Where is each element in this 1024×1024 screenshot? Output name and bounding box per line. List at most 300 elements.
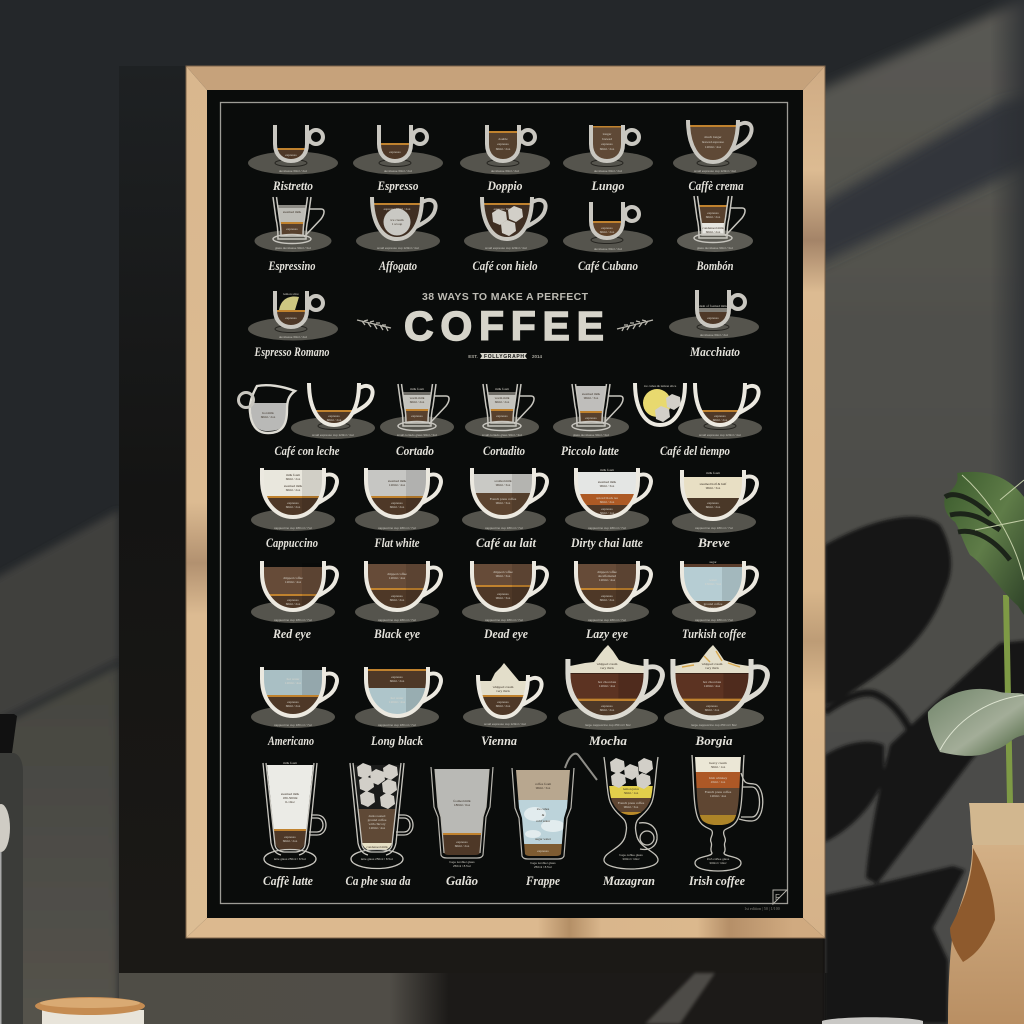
- saucer: [356, 230, 440, 252]
- frame: right rail: [803, 66, 825, 938]
- name: Café del tiempo: [660, 443, 730, 458]
- row 7: Vienna: very thick: [496, 689, 510, 693]
- row 7: Vienna: [463, 663, 547, 748]
- glass outline: [604, 757, 658, 869]
- layers: [278, 205, 306, 234]
- row 5: Flat white: cappuccino cup 180 ml / 7oz: [378, 526, 417, 530]
- cup: espresso: [714, 414, 726, 418]
- tumbler glass outline: [512, 768, 574, 859]
- row 5: Flat white: steamed milk: [388, 479, 406, 483]
- row 1: Doppio: double: [498, 137, 508, 141]
- layers: [432, 769, 492, 856]
- row 2: Café Cubano: demitasse 60ml / 2oz: [594, 247, 623, 251]
- row 8: Galão: 250ml / 8.5oz: [453, 864, 472, 868]
- layers: [262, 670, 324, 717]
- saucer: [563, 230, 653, 252]
- row 5: Flat white: [355, 468, 441, 550]
- row 3: Macchiato: [669, 290, 759, 359]
- row 7: Borgia: hot chocolate: [703, 680, 722, 684]
- row 5: Café au lait: French press coffee: [490, 497, 517, 501]
- name: Frappe: [525, 873, 560, 888]
- row 8: Irish coffee: 45ml / 1oz: [711, 780, 726, 784]
- row 8: Caffè latte: 180-300ml: [283, 796, 297, 800]
- edition note: 1st edition | 50 | 1/100: [744, 906, 780, 911]
- upper leaf: [944, 472, 1024, 615]
- row 8: Frappe: &: [542, 813, 545, 817]
- name: Irish coffee: [688, 873, 745, 888]
- saucer: [355, 509, 439, 531]
- row 5: Breve: 90ml / 3oz: [706, 486, 721, 490]
- row 7: Americano: hot water: [287, 677, 300, 681]
- row 8: Galão: espresso: [456, 840, 468, 844]
- layers: [368, 470, 426, 515]
- row 4: Cortadito: 60ml / 2oz: [495, 400, 510, 404]
- est. line: EST.: [468, 354, 478, 359]
- whipped cream: [675, 645, 749, 673]
- row 2: Affogato: ice cream: [390, 218, 404, 222]
- row 5: Café au lait: [462, 468, 547, 550]
- row 3: Espresso Romano: lemon slice: [283, 292, 299, 296]
- row 4: Cortadito: milk foam: [495, 387, 509, 391]
- row 5: Dirty chai latte: milk foam: [600, 468, 614, 472]
- row 7: Mocha: very thick: [600, 666, 614, 670]
- row 6: Black eye: [355, 561, 441, 641]
- frame: top rail: [186, 66, 825, 90]
- row 8: Caffè latte: milk foam: [283, 761, 297, 765]
- cup: small espresso cup 120ml / 4oz: [699, 433, 742, 437]
- row 8: Frappe: sugar water: [535, 837, 552, 841]
- saucer: [677, 230, 753, 252]
- name: Flat white: [374, 535, 420, 550]
- row 3: Espresso Romano: [248, 291, 338, 359]
- row 7: Vienna: small espresso cup 120ml / 4oz: [484, 722, 527, 726]
- name: Café au lait: [476, 535, 536, 550]
- row 4: Cortado: milk foam: [410, 387, 424, 391]
- row 4: Piccolo latte: espresso: [585, 416, 597, 420]
- name: Café con hielo: [472, 258, 538, 273]
- layers: [472, 563, 534, 611]
- row 8: Mazagran: huge coffee glass: [619, 853, 643, 857]
- ice cubes: [610, 758, 653, 789]
- row 5: Flat white: 60ml / 2oz: [390, 505, 405, 509]
- row 6: Lazy eye: dripped coffee: [597, 570, 617, 574]
- row 1: Lungo: espresso: [601, 142, 613, 146]
- bag top flap: [969, 803, 1024, 845]
- saucer: [248, 318, 338, 340]
- row 2: Espressino: espresso: [286, 227, 298, 231]
- saucer: [353, 152, 443, 174]
- row 8: Galão: huge tumbler glass: [449, 860, 475, 864]
- row 1: Lungo: longer: [603, 132, 612, 136]
- row 8: Irish coffee: 300ml / 10oz: [709, 861, 727, 865]
- name: Borgia: [694, 733, 733, 748]
- row 1: Ristretto: [248, 125, 338, 193]
- name: Cortadito: [483, 443, 525, 458]
- row 8: Irish coffee: French press coffee: [705, 790, 732, 794]
- saucer: [669, 316, 759, 338]
- row 4: Cortado: [380, 384, 454, 458]
- row 8: Mazagran: lemon juice: [623, 787, 639, 791]
- row 2: Bombón: 60ml / 2oz: [706, 230, 721, 234]
- row 7: Borgia: very thick: [705, 666, 719, 670]
- row 8: Caffè latte: steamed milk: [281, 792, 299, 796]
- row 7: Mocha: 120ml / 4oz: [599, 684, 616, 688]
- name: Bombón: [696, 258, 734, 273]
- plant: [928, 472, 1024, 803]
- est. line: 2014: [532, 354, 543, 359]
- row 7: Americano: 120ml / 4oz: [285, 681, 302, 685]
- kraft paper bag: [948, 803, 1024, 1024]
- row 6: Lazy eye: cappuccino cup 180 ml / 7oz: [588, 618, 627, 622]
- row 4: Piccolo latte: steamed milk: [582, 392, 600, 396]
- row 5: Breve: espresso: [707, 501, 719, 505]
- folded corner logo: F: [775, 893, 780, 902]
- row 7: Americano: espresso: [287, 700, 299, 704]
- name: Lazy eye: [585, 626, 628, 641]
- layers: [693, 757, 743, 825]
- row 8: Irish coffee: 120ml / 4oz: [710, 794, 727, 798]
- row 5: Breve: 60ml / 2oz: [706, 505, 721, 509]
- row 8: Frappe: coffee foam: [535, 782, 551, 786]
- saucer: [463, 706, 547, 728]
- name: Long black: [370, 733, 423, 748]
- cup: 60ml / 2oz: [713, 418, 728, 422]
- row 6: Black eye: espresso: [391, 594, 403, 598]
- row 5: Flat white: 120ml / 4oz: [389, 483, 406, 487]
- row 1: Caffè crema: brewed espresso: [702, 140, 724, 144]
- row 8: Ca phe sua da: condensed milk: [366, 845, 388, 849]
- row 2: Affogato: 1 scoop: [392, 222, 403, 226]
- row 6: Turkish coffee: 2 tsp: [710, 606, 717, 610]
- name: Cappuccino: [266, 535, 318, 550]
- laurel left: [357, 320, 391, 331]
- row 8: Ca phe sua da: latte glass 250ml / 8.5oz: [361, 857, 394, 861]
- row 6: Red eye: 120ml / 4oz: [285, 580, 302, 584]
- saucer: [460, 152, 550, 174]
- row 6: Red eye: 60ml / 2oz: [286, 602, 301, 606]
- layers: [576, 472, 638, 518]
- row 5: Dirty chai latte: spiced black tea: [596, 496, 618, 500]
- row 4: Cortadito: small cortado glass 90ml / 3oz: [482, 433, 523, 437]
- row 6: Red eye: cappuccino cup 180 ml / 7oz: [274, 618, 313, 622]
- row 8: Caffè latte: 6-10oz: [285, 800, 295, 804]
- row 5: Breve: [672, 470, 757, 550]
- name: Lungo: [591, 178, 625, 193]
- name: Dead eye: [483, 626, 528, 641]
- row 1: Caffè crema: much longer: [704, 135, 722, 139]
- saucer: [254, 230, 332, 252]
- row 1: Lungo: demitasse 60ml / 2oz: [594, 169, 623, 173]
- pitcher: 60ml / 2oz: [261, 415, 276, 419]
- row 2: Affogato: [356, 197, 440, 273]
- row 1: Ristretto: demitasse 60ml / 2oz: [279, 169, 308, 173]
- whipped cream: [570, 645, 644, 673]
- layers: [699, 308, 727, 324]
- row 8: Caffè latte: [260, 761, 326, 888]
- row 2: Espressino: [254, 197, 332, 273]
- folded corner logo: [773, 890, 787, 904]
- row 2: Café con hielo: small espresso cup 120ml / 4oz: [485, 246, 528, 250]
- row 8: Mazagran: 90ml / 3oz: [624, 805, 639, 809]
- row 7: Americano: [251, 667, 337, 748]
- row 8: Mazagran: ice cubes: [625, 768, 638, 772]
- coffee layers: [381, 143, 409, 159]
- cup: [291, 383, 375, 439]
- row 6: Turkish coffee: cappuccino cup 180 ml / 7oz: [695, 618, 734, 622]
- row 5: Dirty chai latte: espresso: [601, 507, 613, 511]
- row 4: Cortadito: espresso: [496, 414, 508, 418]
- row 6: Turkish coffee: [672, 560, 757, 641]
- row 8: Frappe: ice cubes: [537, 807, 550, 811]
- row 8: Galão: foamed milk: [453, 799, 471, 803]
- frame: left rail: [186, 66, 207, 938]
- poster frame: [186, 66, 825, 938]
- lower leaf: [928, 689, 1024, 756]
- row 4: Cortado: small cortado glass 90ml / 3oz: [397, 433, 438, 437]
- row 6: Dead eye: espresso: [497, 592, 509, 596]
- row 6: Red eye: dripped coffee: [283, 576, 303, 580]
- stem: [1006, 595, 1010, 803]
- row 8: Ca phe sua da: dark roasted: [369, 814, 386, 818]
- row 8: Ca phe sua da: 120ml / 4oz: [369, 826, 386, 830]
- layers: [474, 474, 532, 515]
- heading: COFFEE: [404, 303, 604, 349]
- row 7: Mocha: hot chocolate: [598, 680, 617, 684]
- row 7: Mocha: espresso: [601, 704, 613, 708]
- row 8: Ca phe sua da: [346, 763, 413, 888]
- row 5: Dirty chai latte: cappuccino cup 180 ml / 7oz: [588, 526, 627, 530]
- row 6: Dead eye: 90ml / 3oz: [496, 596, 511, 600]
- saucer: [673, 152, 757, 174]
- row 1: Doppio: 60ml / 2oz: [496, 147, 511, 151]
- saucer: [672, 511, 756, 533]
- subtitle: 38 WAYS TO MAKE A PERFECT: [422, 291, 589, 303]
- row 6: Red eye: [251, 561, 337, 641]
- est. line: [468, 353, 543, 360]
- layers: [698, 205, 728, 234]
- row 4: Piccolo latte: glass demitasse 90ml / 3oz: [573, 433, 610, 437]
- row 7: Americano: cappuccino cup 180 ml / 7oz: [274, 723, 313, 727]
- row 2: Café Cubano: [563, 202, 653, 273]
- row 3: Espresso Romano: espresso: [285, 316, 297, 320]
- cup: small espresso cup 120ml / 4oz: [312, 433, 355, 437]
- row 5: Café au lait: scalded milk: [494, 479, 512, 483]
- layers: [513, 770, 573, 857]
- saucer: [462, 601, 546, 623]
- row 8: Mazagran: 300ml / 10oz: [622, 857, 640, 861]
- saucer: [558, 706, 658, 730]
- row 5: Café au lait: 90ml / 3oz: [496, 483, 511, 487]
- row 5: Dirty chai latte: [565, 468, 651, 550]
- row 7: Americano: 60ml / 2oz: [286, 704, 301, 708]
- row 5: Cappuccino: milk foam: [286, 473, 300, 477]
- layers: [478, 681, 528, 718]
- row 2: Café con hielo: [464, 197, 548, 273]
- row 6: Lazy eye: espresso: [601, 594, 613, 598]
- row 8: Ca phe sua da: ground coffee: [368, 818, 387, 822]
- poster background: [207, 90, 803, 918]
- name: Café con leche: [274, 443, 340, 458]
- row 8: Ca phe sua da: with chicory: [368, 822, 386, 826]
- saucer: [462, 509, 546, 531]
- jar at bottom: [35, 997, 145, 1024]
- saucer: [664, 706, 764, 730]
- row 4: Cortado: warm milk: [410, 396, 425, 400]
- name: Ca phe sua da: [346, 873, 411, 888]
- name: Café Cubano: [578, 258, 638, 273]
- row 7: Mocha: 60ml / 2oz: [600, 708, 615, 712]
- row 3: Espresso Romano: demitasse 60ml / 2oz: [279, 335, 308, 339]
- row 6: Lazy eye: decaffeinated: [598, 574, 616, 578]
- pitcher: [238, 385, 295, 433]
- coffee layers: [593, 126, 621, 159]
- row 8: Mazagran: French press coffee: [618, 801, 645, 805]
- name: Black eye: [373, 626, 420, 641]
- row 5: Dirty chai latte: steamed milk: [598, 480, 616, 484]
- layers: [682, 564, 744, 611]
- row 1: Doppio: [460, 125, 550, 193]
- name: Doppio: [487, 178, 523, 193]
- layers: [374, 203, 420, 237]
- name: Galão: [446, 873, 478, 888]
- layers: [277, 296, 305, 325]
- row 8: Frappe: [512, 754, 597, 888]
- row 7: Mocha: whipped cream: [597, 662, 618, 666]
- row 7: Long black: espresso: [391, 675, 403, 679]
- glass outline: [692, 755, 763, 871]
- row 2: Affogato: small espresso cup 120ml / 4oz: [377, 246, 420, 250]
- row 5: Dirty chai latte: 30ml / 1oz: [600, 511, 615, 515]
- row 2: Café Cubano: espresso: [601, 226, 613, 230]
- saucer: [380, 416, 454, 438]
- layers: [366, 563, 428, 611]
- row 2: Bombón: condensed milk: [702, 226, 724, 230]
- row 2: Bombón: espresso: [707, 211, 719, 215]
- row 1: Lungo: 60ml / 2oz: [600, 147, 615, 151]
- row 6: Black eye: cappuccino cup 180 ml / 7oz: [378, 618, 417, 622]
- row 2: Café Cubano: 60ml / 2oz: [600, 230, 615, 234]
- row 4: Café con leche: [238, 383, 375, 458]
- saucer: [553, 416, 629, 438]
- row 3: Macchiato: demitasse 60ml / 2oz: [700, 333, 729, 337]
- row 7: Vienna: 60ml / 2oz: [496, 704, 511, 708]
- layers: [262, 563, 324, 611]
- layers: [347, 765, 407, 851]
- row 5: Breve: milk foam: [706, 471, 720, 475]
- name: Espresso: [377, 178, 419, 193]
- layers: [484, 203, 530, 237]
- layers: [606, 786, 656, 817]
- row 5: Cappuccino: cappuccino cup 180 ml / 7oz: [274, 526, 313, 530]
- row 6: Dead eye: 90ml / 3oz: [496, 574, 511, 578]
- cup: [678, 383, 762, 439]
- row 7: Long black: 60ml / 2oz: [390, 679, 405, 683]
- name: Macchiato: [689, 344, 740, 359]
- row 1: Lungo: [563, 125, 653, 193]
- row 8: Frappe: huge tumbler glass: [530, 861, 556, 865]
- layers: [366, 669, 428, 717]
- row 4: Piccolo latte: 90ml / 3oz: [584, 396, 599, 400]
- cup: espresso: [328, 414, 340, 418]
- row 2: Affogato: espresso 60ml / 2oz: [384, 207, 411, 211]
- row 5: Cappuccino: espresso: [287, 501, 299, 505]
- saucer: [565, 509, 649, 531]
- row 1: Caffè crema: [673, 120, 757, 193]
- whipped cream: [478, 663, 528, 689]
- tumbler glass outline: [431, 767, 493, 858]
- name: Mazagran: [602, 873, 655, 888]
- plant shadow on wall: [825, 517, 1024, 1024]
- coffee layers: [277, 148, 305, 159]
- est. line: FOLLYGRAPH: [484, 354, 524, 360]
- row 7: Mocha: large cappuccino cup 250 ml / 8oz: [585, 723, 631, 727]
- row 6: Turkish coffee: sugar: [709, 560, 718, 564]
- row 8: Galão: 180ml / 6oz: [454, 803, 471, 807]
- name: Piccolo latte: [561, 443, 619, 458]
- row 5: Breve: cappuccino cup 180 ml / 7oz: [695, 526, 734, 530]
- layers: [576, 386, 606, 423]
- row 7: Long black: hot water: [391, 696, 404, 700]
- row 8: Mazagran: 30ml / 1oz: [624, 791, 639, 795]
- row 7: Borgia: espresso: [706, 704, 718, 708]
- row 8: Frappe: cold water: [536, 819, 551, 823]
- pitcher: hot milk: [262, 411, 274, 415]
- bottle at left edge: [0, 714, 23, 1024]
- ice and lemon bowl: ice cubes & lemon slice: [644, 384, 677, 388]
- row 1: Espresso: demitasse 60ml / 2oz: [384, 169, 413, 173]
- row 6: Red eye: espresso: [287, 598, 299, 602]
- name: Affogato: [378, 258, 417, 273]
- row 7: Vienna: whipped cream: [493, 685, 514, 689]
- row 5: Café au lait: cappuccino cup 180 ml / 7oz: [485, 526, 524, 530]
- straw: [565, 754, 597, 780]
- row 4: Piccolo latte: [553, 384, 629, 458]
- saucer: [251, 706, 335, 728]
- name: Red eye: [272, 626, 311, 641]
- name: Caffè crema: [688, 178, 744, 193]
- layers: [403, 392, 431, 422]
- saucer: [672, 601, 756, 623]
- row 5: Cappuccino: [251, 468, 337, 550]
- row 2: Café con hielo: espresso 60ml / 2oz: [494, 207, 521, 211]
- saucer: [465, 416, 539, 438]
- row 2: Bombón: [677, 196, 753, 273]
- row 1: Doppio: espresso: [497, 142, 509, 146]
- coffee layers: [690, 125, 736, 160]
- row 7: Borgia: 120ml / 4oz: [704, 684, 721, 688]
- saucer: [248, 152, 338, 174]
- row 3: Macchiato: dash of foamed milk: [699, 304, 727, 308]
- saucer: [464, 230, 548, 252]
- row 6: Turkish coffee: ground coffee: [704, 602, 723, 606]
- row 7: Long black: cappuccino cup 180 ml / 7oz: [378, 723, 417, 727]
- row 2: Bombón: 60ml / 2oz: [706, 215, 721, 219]
- row 2: Espressino: glass demitasse 90ml / 3oz: [275, 246, 312, 250]
- row 8: Irish coffee: 30ml / 1oz: [711, 765, 726, 769]
- row 7: Borgia: large cappuccino cup 250 ml / 8oz: [691, 723, 737, 727]
- laurel right: [617, 320, 653, 331]
- saucer: [251, 509, 335, 531]
- row 5: Cappuccino: 60ml / 2oz: [286, 505, 301, 509]
- saucer: [251, 601, 335, 623]
- row 8: Mazagran: [602, 757, 658, 888]
- name: Turkish coffee: [682, 626, 746, 641]
- row 8: Irish coffee: heavy cream: [709, 761, 727, 765]
- row 5: Café au lait: 90ml / 3oz: [496, 501, 511, 505]
- row 8: Frappe: espresso: [537, 849, 549, 853]
- row 2: Espressino: steamed milk: [283, 210, 301, 214]
- row 8: Irish coffee: Irish whiskey: [709, 776, 727, 780]
